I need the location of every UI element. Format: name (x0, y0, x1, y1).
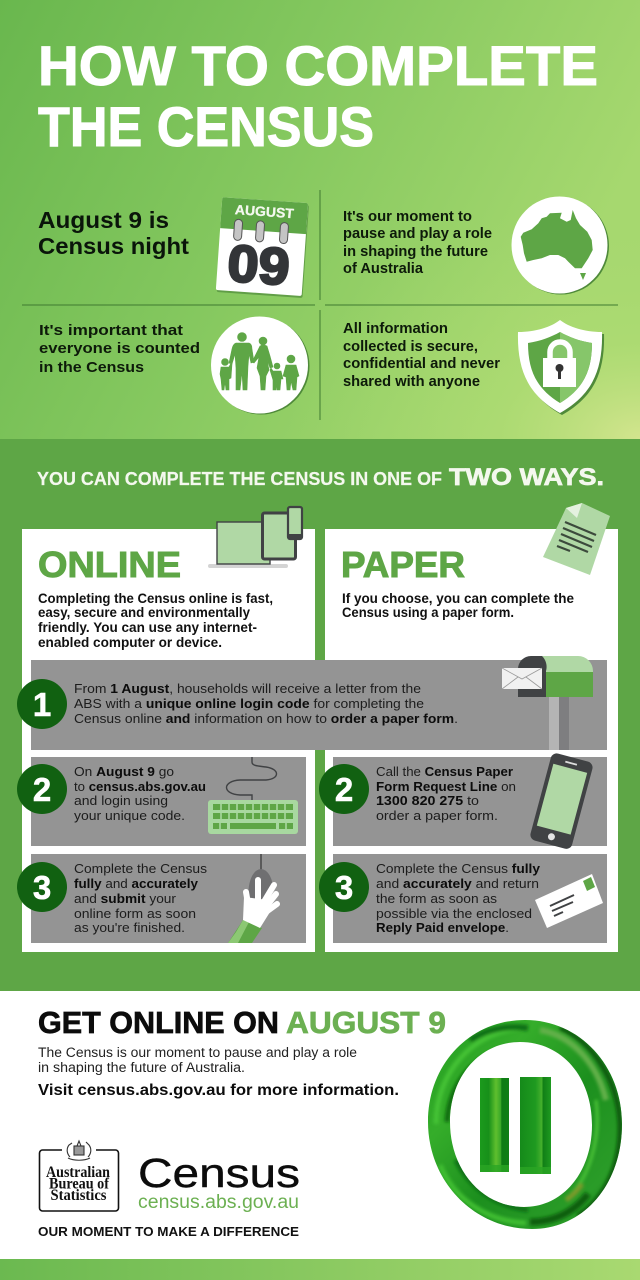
badge: 3 (17, 862, 67, 912)
text: everyone is counted (39, 322, 200, 376)
text: our moment: in shaping the future (343, 243, 488, 260)
text: step 1: ABS with a unique online login code for completing the (74, 696, 424, 711)
panel: paper (325, 503, 618, 952)
title: HOW TO COMPLETE (38, 34, 598, 97)
text: information secure: shared with anyone (343, 373, 480, 390)
panel: online (22, 507, 315, 952)
heading: get online on August 9 (38, 1006, 446, 1040)
text: footer description: The Census is our moment to pause and play a role (38, 1045, 357, 1060)
text: paper step 3: possible via the enclosed (376, 906, 532, 921)
panel: paper step 2 (319, 752, 607, 850)
heading: get online on August 9: AUGUST 9 (286, 1006, 446, 1040)
logo: Australian Bureau of Statistics: Bureau of (49, 1176, 110, 1192)
text: footer description (38, 1045, 357, 1075)
icon: calendar: 09 (226, 235, 292, 297)
title (38, 34, 598, 158)
heading: online: ONLINE (38, 544, 181, 585)
text: information secure: All information (343, 320, 448, 337)
icon: keyboard (208, 757, 298, 834)
text: paper step 3: Complete the Census fully (376, 861, 541, 876)
text: step 1: From 1 August , households will receive a letter from the (74, 681, 421, 696)
text: online step 3: Complete the Census (74, 861, 208, 876)
logo: Census wordmark (138, 1150, 300, 1213)
badge: 2 (17, 764, 67, 814)
text: online description: Completing the Census online is fast, (38, 591, 273, 606)
icon: devices (208, 507, 302, 568)
text: tagline: OUR MOMENT TO MAKE A DIFFERENCE (38, 1225, 299, 1239)
badge: 1 (17, 679, 67, 729)
panel: hero background (0, 0, 640, 439)
icon: calendar: AUGUST (234, 202, 295, 221)
text: online step 3: as you're finished. (74, 920, 185, 935)
text: online step 2: and login using (74, 793, 168, 808)
text: paper step 2: Form Request Line on (376, 779, 516, 794)
text: online step 3 (74, 861, 208, 935)
icon: calendar (216, 197, 309, 298)
badge: 3: 3 (33, 869, 51, 906)
text: information secure: collected is secure, (343, 338, 478, 355)
heading: two ways (37, 464, 604, 491)
panel: footer (0, 991, 640, 1259)
panel: paper step 3 (319, 854, 607, 943)
title: THE CENSUS (38, 95, 374, 158)
panel: two ways background (0, 439, 640, 991)
icon: mailbox (502, 656, 593, 750)
logo: Census wordmark: Census (138, 1150, 300, 1196)
text: online step 2 (74, 764, 206, 823)
text: August 9 is Census night (38, 207, 189, 259)
text: information secure (343, 320, 500, 390)
text: August 9 is Census night: Census night (38, 233, 189, 259)
icon: smartphone (529, 752, 594, 850)
text: paper step 3: and accurately and return (376, 876, 539, 891)
logo: Australian Bureau of Statistics (40, 1141, 118, 1211)
text: paper step 3: Reply Paid envelope. (376, 920, 509, 935)
badge: 1: 1 (33, 686, 51, 723)
text: paper step 3 (376, 861, 541, 935)
icon: security shield (518, 320, 604, 415)
text: everyone is counted: in the Census (39, 359, 144, 376)
text: online description: enabled computer or device. (38, 635, 222, 650)
logo: Australian Bureau of Statistics: Australian (46, 1164, 110, 1181)
text: paper step 2: 1300 820 275 to (376, 793, 479, 808)
icon: hand on mouse (228, 854, 277, 943)
text: online step 2: On August 9 go (74, 764, 174, 779)
text: paper step 2 (376, 764, 516, 823)
text: online step 2: to census.abs.gov.au (74, 779, 206, 794)
icon: paper document (543, 503, 610, 575)
text: online step 3: fully and accurately (74, 876, 199, 891)
icon: green pause ring (428, 1020, 622, 1229)
text: everyone is counted: It's important that (39, 322, 183, 339)
logo: Australian Bureau of Statistics: Statistics (50, 1187, 106, 1204)
panel: step 1 (17, 656, 607, 750)
icon: envelope (535, 874, 603, 928)
text: paper step 3: the form as soon as (376, 891, 498, 906)
text: visit website: Visit census.abs.gov.au for more information. (38, 1082, 399, 1099)
text: online description: friendly. You can use any internet- (38, 620, 257, 635)
panel: online step 3 (17, 854, 306, 943)
text: information secure: confidential and never (343, 355, 500, 372)
heading: two ways: TWO WAYS. (449, 464, 604, 491)
text: online description (38, 591, 273, 650)
text: footer description: in shaping the future of Australia. (38, 1060, 245, 1075)
heading: two ways: YOU CAN COMPLETE THE CENSUS IN ONE OF (37, 469, 442, 489)
pause bars (480, 1077, 551, 1174)
text: online description: easy, secure and environmentally (38, 605, 250, 620)
text: paper description: If you choose, you can complete the (342, 591, 574, 606)
text: everyone is counted: everyone is counted (39, 340, 200, 357)
icon: Australia map (512, 196, 609, 294)
panel: bottom strip (0, 1259, 640, 1280)
text: our moment: It's our moment to (343, 208, 472, 225)
text: step 1 (74, 681, 458, 726)
badge: 3 (319, 862, 369, 912)
badge: 3: 3 (335, 869, 353, 906)
panel: online step 2 (17, 757, 306, 846)
text: online step 3: and submit your (74, 891, 177, 906)
text: step 1: Census online and information on how to order a paper form . (74, 711, 458, 726)
text: paper description (342, 591, 574, 620)
icon: family in circle (211, 316, 310, 414)
heading: paper: PAPER (341, 544, 465, 585)
logo: Census wordmark: census.abs.gov.au (138, 1192, 299, 1213)
text: our moment: pause and play a role (343, 225, 492, 242)
badge: 2: 2 (33, 771, 51, 808)
text: our moment: of Australia (343, 260, 424, 277)
text: our moment (343, 208, 492, 277)
badge: 2: 2 (335, 771, 353, 808)
text: August 9 is Census night: August 9 is (38, 207, 169, 233)
heading: get online on August 9: GET ONLINE ON (38, 1006, 279, 1040)
text: paper description: Census using a paper form. (342, 605, 514, 620)
text: online step 3: online form as soon (74, 906, 196, 921)
text: paper step 2: Call the Census Paper (376, 764, 513, 779)
text: online step 2: your unique code. (74, 808, 185, 823)
badge: 2 (319, 764, 369, 814)
text: paper step 2: order a paper form. (376, 808, 498, 823)
